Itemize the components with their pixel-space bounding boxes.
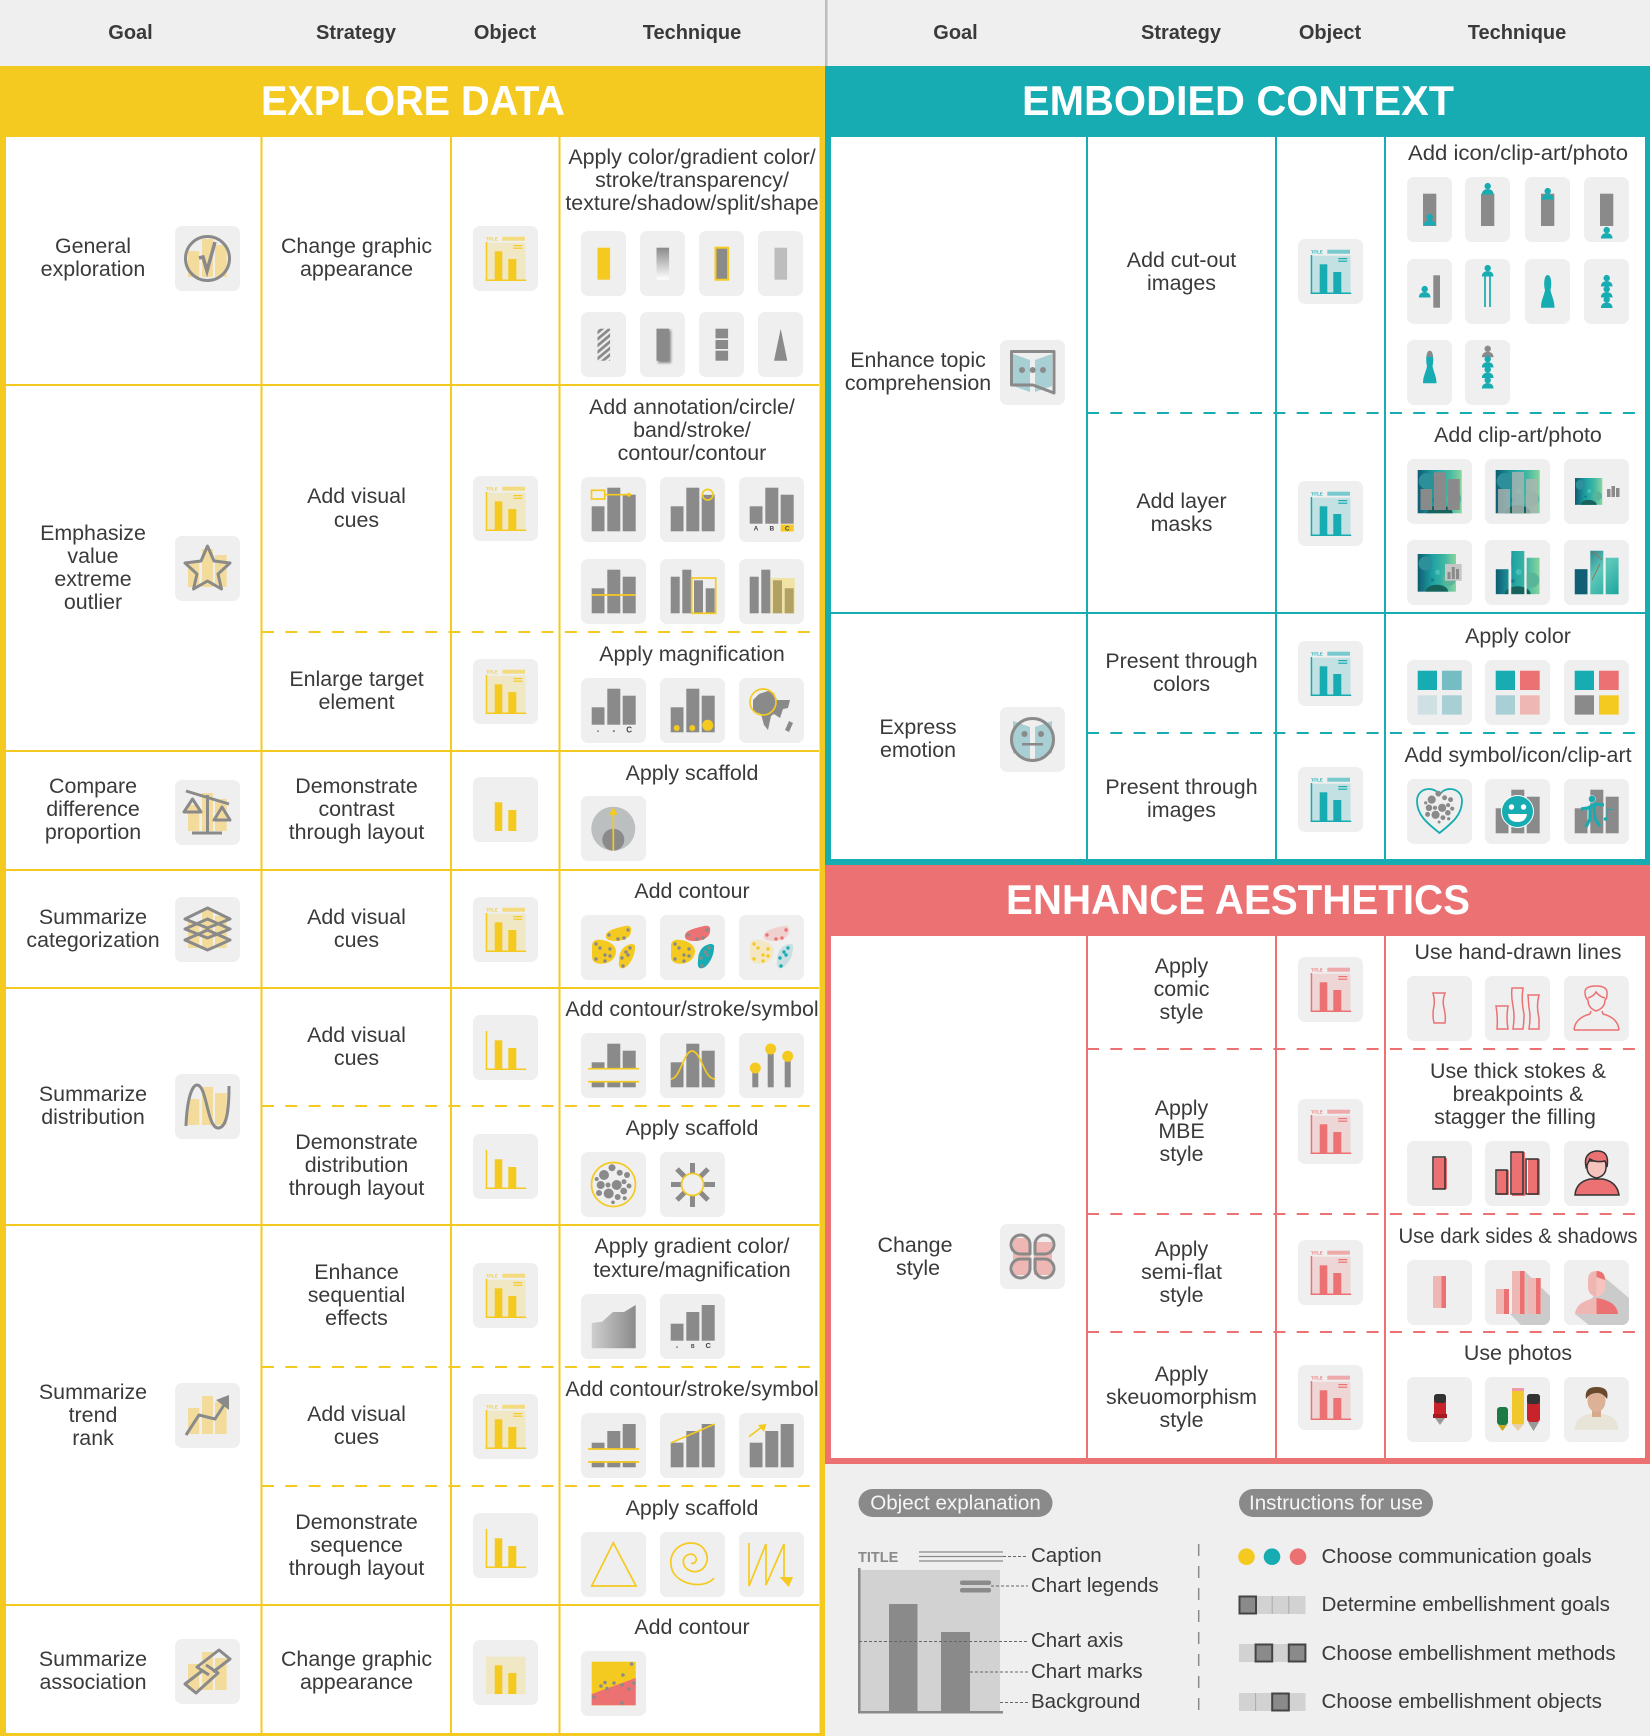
technique: ascending bars with labels: C bbox=[705, 1341, 711, 1350]
strategy labels: cues bbox=[334, 1046, 379, 1070]
column heading: left: Goal bbox=[108, 22, 153, 44]
object tile teal 1: TITLE bbox=[1311, 250, 1323, 255]
instructions text: Choose embellishment objects bbox=[1322, 1690, 1602, 1713]
technique: magnified label: C bbox=[626, 726, 632, 734]
object tile teal 3 bbox=[1298, 641, 1363, 706]
column heading: right: Goal bbox=[933, 22, 978, 44]
object tile 6: axis bbox=[473, 1015, 538, 1080]
technique labels: Apply scaffold bbox=[626, 761, 758, 785]
technique labels: Apply color bbox=[1465, 624, 1571, 648]
technique: photo through transparent bars bbox=[1485, 459, 1550, 524]
panel: explore data bbox=[0, 66, 825, 1736]
goal labels: difference bbox=[46, 797, 140, 821]
technique: mixed colours bbox=[1564, 660, 1629, 725]
heading: explore data: EXPLORE DATA bbox=[261, 77, 565, 124]
strategy labels: distribution bbox=[305, 1153, 408, 1177]
goal labels: Summarize bbox=[39, 1082, 147, 1106]
goal labels: proportion bbox=[45, 820, 141, 844]
goal and strategy labels: Present through bbox=[1105, 649, 1258, 673]
callout labels: Chart axis bbox=[1031, 1629, 1123, 1652]
strategy labels: Demonstrate bbox=[295, 1510, 418, 1534]
technique labels: breakpoints & bbox=[1453, 1082, 1583, 1106]
technique: gradient bbox=[640, 231, 685, 296]
technique labels: band/stroke/ bbox=[633, 418, 751, 442]
technique: single hue colours bbox=[1407, 660, 1472, 725]
legend: embellishment objects bar bbox=[1239, 1693, 1306, 1711]
object tile 2 bbox=[473, 476, 538, 541]
technique: spiral scaffold bbox=[660, 1532, 725, 1597]
strategy labels: Add visual bbox=[307, 484, 406, 508]
technique: dancer over chart bbox=[1564, 779, 1629, 844]
technique labels: Use thick stokes & bbox=[1430, 1059, 1606, 1083]
pill: instructions for use: Instructions for use bbox=[1249, 1492, 1423, 1514]
object tile 8 bbox=[473, 1263, 538, 1328]
technique: hand-drawn bar bbox=[1407, 976, 1472, 1041]
technique: semi-flat chart bbox=[1485, 1260, 1550, 1325]
column heading: left: Technique bbox=[643, 22, 741, 44]
strategy labels: appearance bbox=[300, 257, 413, 281]
goal labels: extreme bbox=[54, 567, 132, 591]
column heading: left: Strategy bbox=[316, 22, 397, 44]
goal and strategy labels: Express bbox=[879, 715, 957, 739]
object tile 9: TITLE bbox=[486, 1405, 498, 1410]
object tile coral 4: TITLE bbox=[1311, 1376, 1323, 1381]
goal labels: association bbox=[39, 1670, 147, 1694]
object tile teal 3: TITLE bbox=[1311, 652, 1323, 657]
technique: hand-drawn person bbox=[1564, 976, 1629, 1041]
goal labels: distribution bbox=[41, 1105, 145, 1129]
panel: enhance aesthetics bbox=[825, 865, 1650, 1464]
technique labels: Apply gradient color/ bbox=[594, 1234, 790, 1258]
goal and strategy labels: style bbox=[1160, 1000, 1203, 1024]
technique: photo bar bbox=[1407, 1377, 1472, 1442]
technique labels: Apply color/gradient color/ bbox=[568, 145, 816, 169]
goal labels: trend bbox=[69, 1403, 117, 1427]
technique: semi-flat person bbox=[1564, 1260, 1629, 1325]
technique labels: Use photos bbox=[1464, 1341, 1572, 1365]
technique labels: Apply magnification bbox=[599, 642, 785, 666]
icon: change style clover bbox=[1000, 1224, 1065, 1289]
pill: object explanation: Object explanation bbox=[870, 1492, 1041, 1514]
technique: triangle scaffold bbox=[581, 1532, 646, 1597]
object tile coral 1 bbox=[1298, 957, 1363, 1022]
technique: stacked icons with grey top bbox=[1465, 340, 1510, 405]
technique: photo objects bbox=[1485, 1377, 1550, 1442]
technique: MBE chart bbox=[1485, 1141, 1550, 1206]
header band bbox=[0, 0, 1650, 66]
technique: ascending bars with labels: A bbox=[676, 1345, 679, 1349]
icon: distribution curve bbox=[175, 1074, 240, 1139]
technique: ascending bars with labels: B bbox=[691, 1344, 695, 1350]
technique: circle bbox=[660, 477, 725, 542]
strategy labels: cues bbox=[334, 1425, 379, 1449]
column heading: right: Object bbox=[1299, 22, 1361, 44]
technique label: icon clip-art photo: Add icon/clip-art/photo bbox=[1408, 141, 1628, 165]
strategy labels: through layout bbox=[289, 820, 424, 844]
technique: hand-drawn chart bbox=[1485, 976, 1550, 1041]
instructions text: Choose communication goals bbox=[1322, 1545, 1592, 1568]
technique: icon below bbox=[1584, 177, 1629, 242]
technique labels: Use hand-drawn lines bbox=[1415, 940, 1621, 964]
icon: book speech bubble bbox=[1000, 340, 1065, 405]
object tile teal 4: TITLE bbox=[1311, 778, 1323, 783]
technique: multi-colour blobs bbox=[660, 915, 725, 980]
goal and strategy labels: emotion bbox=[880, 738, 956, 762]
column heading: left: Object bbox=[474, 22, 536, 44]
goal and strategy labels: style bbox=[896, 1256, 940, 1280]
icon: emphasize star bbox=[175, 536, 240, 601]
technique: annotation bbox=[581, 477, 646, 542]
technique: stroke line bbox=[581, 559, 646, 624]
technique: magnified map bbox=[739, 678, 804, 743]
goal labels: value bbox=[67, 544, 119, 568]
goal and strategy labels: colors bbox=[1153, 672, 1210, 696]
instructions text: Choose embellishment methods bbox=[1322, 1642, 1616, 1665]
technique: MBE bar bbox=[1407, 1141, 1472, 1206]
strategy labels: sequence bbox=[310, 1533, 403, 1557]
strategy labels: through layout bbox=[289, 1556, 424, 1580]
goal and strategy labels: MBE bbox=[1158, 1119, 1205, 1143]
technique: magnified label bbox=[581, 678, 646, 743]
object tile coral 3: TITLE bbox=[1311, 1251, 1323, 1256]
icon: neutral face bbox=[1000, 707, 1065, 772]
object tile coral 2 bbox=[1298, 1099, 1363, 1164]
diagram: chart anatomy bbox=[858, 1544, 1159, 1714]
technique: band bbox=[739, 477, 804, 542]
technique labels: Add contour bbox=[634, 1615, 750, 1639]
technique: ascending bars with labels bbox=[660, 1294, 725, 1359]
technique: stretched icon bbox=[1465, 259, 1510, 324]
icon: compare scale bbox=[175, 780, 240, 845]
goal labels: rank bbox=[72, 1426, 114, 1450]
object tile 3: TITLE bbox=[486, 670, 498, 675]
technique labels: Add symbol/icon/clip-art bbox=[1404, 743, 1632, 767]
technique: zigzag scaffold bbox=[739, 1532, 804, 1597]
legend: embellishment methods bar bbox=[1239, 1644, 1306, 1662]
heading: enhance aesthetics: ENHANCE AESTHETICS bbox=[1006, 876, 1470, 923]
technique: photo behind bars bbox=[1407, 459, 1472, 524]
object tile teal 2 bbox=[1298, 481, 1363, 546]
technique: magnified dots bbox=[660, 678, 725, 743]
goal labels: Summarize bbox=[39, 905, 147, 929]
callout labels: Caption bbox=[1031, 1544, 1102, 1567]
technique labels: Add contour/stroke/symbol bbox=[565, 997, 819, 1021]
strategy labels: Change graphic bbox=[281, 1647, 432, 1671]
goal and strategy labels: Apply bbox=[1155, 954, 1209, 978]
strategy labels: sequential bbox=[308, 1283, 405, 1307]
goal labels: exploration bbox=[41, 257, 145, 281]
technique: yellow contour blobs bbox=[581, 915, 646, 980]
goal labels: Emphasize bbox=[40, 521, 146, 545]
technique labels: Add contour/stroke/symbol bbox=[565, 1377, 819, 1401]
technique: icon overlapping top bbox=[1525, 177, 1570, 242]
goal and strategy labels: comic bbox=[1154, 977, 1210, 1001]
goal labels: Compare bbox=[49, 774, 137, 798]
goal labels: categorization bbox=[26, 928, 160, 952]
callout labels: Chart marks bbox=[1031, 1660, 1143, 1683]
technique: stroke bbox=[699, 231, 744, 296]
technique: pawn bbox=[1525, 259, 1570, 324]
technique: shape bbox=[758, 312, 803, 377]
instructions text: Determine embellishment goals bbox=[1322, 1593, 1610, 1616]
technique: band lines bbox=[581, 1033, 646, 1098]
technique: band: A bbox=[754, 526, 759, 533]
goal labels: Summarize bbox=[39, 1647, 147, 1671]
object tile 11: background bbox=[473, 1640, 538, 1705]
object tile 10: axis bbox=[473, 1513, 538, 1578]
strategy labels: contrast bbox=[318, 797, 395, 821]
goal and strategy labels: style bbox=[1160, 1283, 1203, 1307]
object tile 7: axis bbox=[473, 1134, 538, 1199]
goal and strategy labels: style bbox=[1160, 1142, 1203, 1166]
goal and strategy labels: images bbox=[1147, 798, 1216, 822]
strategy labels: effects bbox=[325, 1306, 388, 1330]
technique labels: texture/shadow/split/shape bbox=[565, 191, 819, 215]
technique labels: Apply scaffold bbox=[626, 1496, 758, 1520]
strategy labels: cues bbox=[334, 508, 379, 532]
panel: explanation and instructions bbox=[825, 1464, 1650, 1736]
object tile 5 bbox=[473, 897, 538, 962]
technique labels: stroke/transparency/ bbox=[595, 168, 789, 192]
object tile coral 4 bbox=[1298, 1365, 1363, 1430]
goal and strategy labels: Enhance topic bbox=[850, 348, 986, 372]
technique labels: Apply scaffold bbox=[626, 1116, 758, 1140]
technique label: dark sides: Use dark sides & shadows bbox=[1398, 1224, 1638, 1248]
technique: band: B bbox=[769, 526, 774, 533]
goal and strategy labels: Apply bbox=[1155, 1096, 1209, 1120]
icon: general exploration bbox=[175, 226, 240, 291]
column heading: right: Strategy bbox=[1141, 22, 1222, 44]
goal and strategy labels: images bbox=[1147, 271, 1216, 295]
object tile 2: TITLE bbox=[486, 487, 498, 492]
goal and strategy labels: style bbox=[1160, 1408, 1203, 1432]
technique: coloured regions scatter bbox=[581, 1651, 646, 1716]
technique: two hue colours bbox=[1485, 660, 1550, 725]
strategy labels: Demonstrate bbox=[295, 1130, 418, 1154]
technique: texture bbox=[581, 312, 626, 377]
strategy labels: Demonstrate bbox=[295, 774, 418, 798]
technique: magnified label: B bbox=[613, 729, 616, 733]
technique: photo of person bbox=[1564, 1377, 1629, 1442]
technique: semi-flat bar bbox=[1407, 1260, 1472, 1325]
icon: layers bbox=[175, 897, 240, 962]
technique: smiley over chart bbox=[1485, 779, 1550, 844]
technique: color bbox=[581, 231, 626, 296]
technique labels: stagger the filling bbox=[1434, 1105, 1596, 1129]
object tile teal 1 bbox=[1298, 239, 1363, 304]
strategy labels: appearance bbox=[300, 1670, 413, 1694]
goal and strategy labels: masks bbox=[1151, 512, 1212, 536]
goal and strategy labels: comprehension bbox=[845, 371, 991, 395]
object tile 5: TITLE bbox=[486, 908, 498, 913]
technique: transparency bbox=[758, 231, 803, 296]
object tile 8: TITLE bbox=[486, 1274, 498, 1279]
technique: circle packing bbox=[581, 1152, 646, 1217]
technique: rising arrow bbox=[739, 1413, 804, 1478]
goal and strategy labels: Add layer bbox=[1136, 489, 1227, 513]
goal and strategy labels: Present through bbox=[1105, 775, 1258, 799]
technique: split bbox=[699, 312, 744, 377]
legend: embellishment goals bar bbox=[1239, 1596, 1306, 1614]
object tile 1 bbox=[473, 226, 538, 291]
goal and strategy labels: skeuomorphism bbox=[1106, 1385, 1257, 1409]
technique labels: contour/contour bbox=[618, 441, 766, 465]
strategy labels: Add visual bbox=[307, 1023, 406, 1047]
goal labels: Summarize bbox=[39, 1380, 147, 1404]
technique: chart inset on photo bbox=[1407, 540, 1472, 605]
technique: radial scaffold bbox=[581, 796, 646, 861]
technique labels: Add clip-art/photo bbox=[1434, 423, 1602, 447]
technique: stacked icons bbox=[1584, 259, 1629, 324]
technique labels: Add annotation/circle/ bbox=[589, 395, 795, 419]
panel: embodied context bbox=[825, 66, 1650, 865]
technique: icon on top bbox=[1465, 177, 1510, 242]
technique: photo masked by bars bbox=[1485, 540, 1550, 605]
technique: contour fill bbox=[739, 559, 804, 624]
strategy labels: Enlarge target bbox=[289, 667, 424, 691]
technique: MBE person bbox=[1564, 1141, 1629, 1206]
callout labels: Chart legends bbox=[1031, 1574, 1159, 1597]
technique: gradient area bbox=[581, 1294, 646, 1359]
technique: icon in bar bbox=[1407, 177, 1452, 242]
technique: heart symbol bbox=[1407, 779, 1472, 844]
object tile 1: TITLE bbox=[486, 237, 498, 242]
technique: pale blobs bbox=[739, 915, 804, 980]
strategy labels: Enhance bbox=[314, 1260, 399, 1284]
technique: pawn with grey head bbox=[1407, 340, 1452, 405]
goal and strategy labels: Change bbox=[878, 1233, 952, 1257]
strategy labels: through layout bbox=[289, 1176, 424, 1200]
label: title: TITLE bbox=[858, 1550, 899, 1566]
callout labels: Background bbox=[1031, 1690, 1140, 1713]
technique: shadow bbox=[640, 312, 685, 377]
strategy labels: Change graphic bbox=[281, 234, 432, 258]
icon: association link bbox=[175, 1639, 240, 1704]
goal labels: outlier bbox=[64, 590, 122, 614]
object tile coral 3 bbox=[1298, 1240, 1363, 1305]
object tile coral 2: TITLE bbox=[1311, 1110, 1323, 1115]
goal and strategy labels: Apply bbox=[1155, 1237, 1209, 1261]
column heading: right: Technique bbox=[1468, 22, 1566, 44]
goal and strategy labels: Add cut-out bbox=[1127, 248, 1236, 272]
strategy labels: element bbox=[318, 690, 395, 714]
technique: icon beside bbox=[1407, 259, 1452, 324]
technique: sunburst bbox=[660, 1152, 725, 1217]
technique: contour box bbox=[660, 559, 725, 624]
technique: different photos masked by bars bbox=[1564, 540, 1629, 605]
legend: communication goals dots bbox=[1238, 1548, 1306, 1565]
technique: band: C bbox=[785, 526, 790, 533]
strategy labels: Add visual bbox=[307, 1402, 406, 1426]
object tile 9 bbox=[473, 1394, 538, 1459]
goal and strategy labels: Apply bbox=[1155, 1362, 1209, 1386]
technique: bell curve bbox=[660, 1033, 725, 1098]
technique labels: texture/magnification bbox=[593, 1258, 791, 1282]
object tile 4: marks only bbox=[473, 777, 538, 842]
technique: rising line bbox=[660, 1413, 725, 1478]
icon: trend arrow bbox=[175, 1383, 240, 1448]
object tile teal 4 bbox=[1298, 767, 1363, 832]
technique: photo beside chart bbox=[1564, 459, 1629, 524]
goal labels: General bbox=[55, 234, 131, 258]
object tile teal 2: TITLE bbox=[1311, 492, 1323, 497]
technique labels: Add contour bbox=[634, 879, 750, 903]
technique: rising band bbox=[581, 1413, 646, 1478]
object tile coral 1: TITLE bbox=[1311, 968, 1323, 973]
goal and strategy labels: semi-flat bbox=[1141, 1260, 1222, 1284]
technique: magnified label: A bbox=[597, 729, 600, 733]
strategy labels: Add visual bbox=[307, 905, 406, 929]
strategy labels: cues bbox=[334, 928, 379, 952]
heading: embodied context: EMBODIED CONTEXT bbox=[1022, 77, 1454, 124]
object tile 3 bbox=[473, 659, 538, 724]
technique: lollipop bbox=[739, 1033, 804, 1098]
